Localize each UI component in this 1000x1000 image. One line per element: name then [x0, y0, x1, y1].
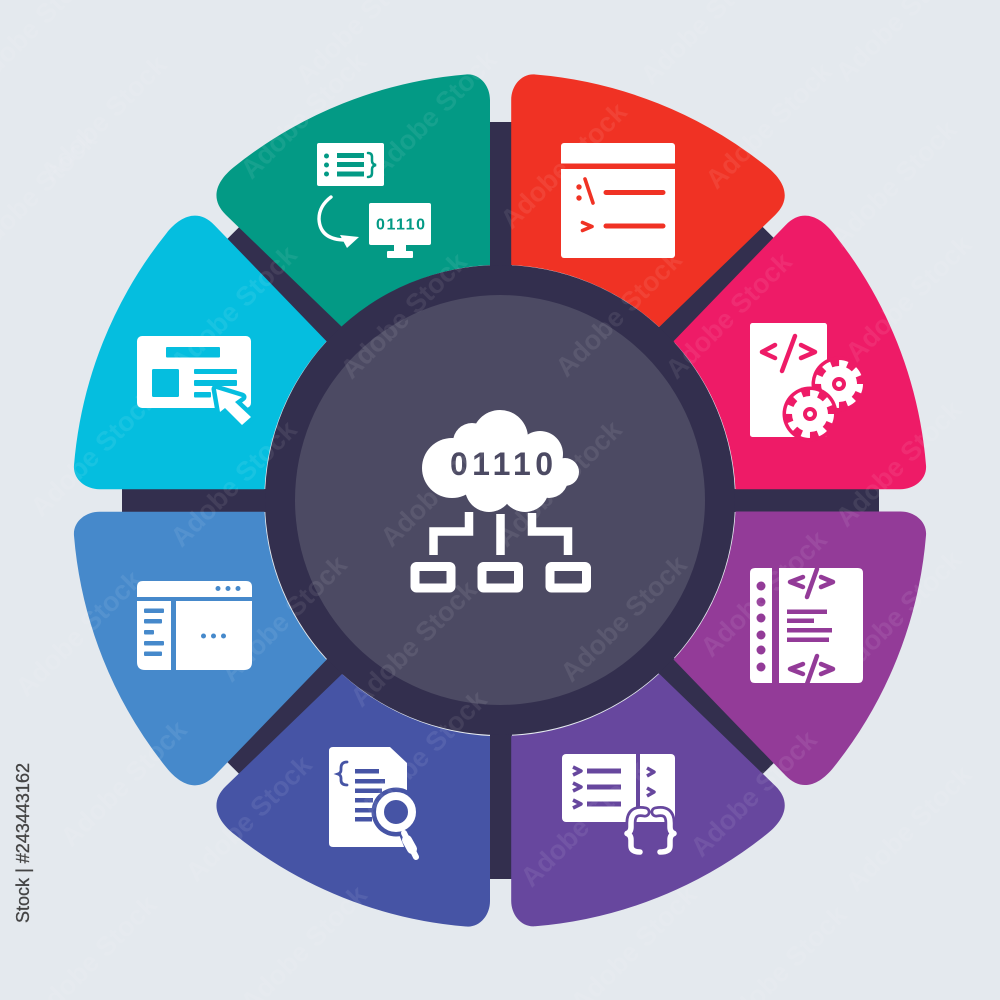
- segment: red: [511, 74, 785, 327]
- stock id label: Stock | #243443162: [13, 763, 33, 923]
- watermark text: Adobe Stock: [235, 46, 373, 185]
- panel: code settings: [674, 216, 926, 489]
- icon: code document with gears: [750, 323, 866, 442]
- icon: code editor page: [750, 568, 863, 684]
- watermark text: Adobe Stock: [25, 384, 163, 523]
- watermark text: Adobe Stock: [660, 246, 798, 385]
- icon: cloud binary network: [415, 410, 586, 588]
- segment: blue: [74, 512, 326, 785]
- network nodes: [415, 566, 586, 588]
- panel: code book: [511, 674, 785, 926]
- watermark text: Adobe Stock: [830, 544, 968, 683]
- watermark text: Adobe Stock: [345, 574, 483, 713]
- watermark text: Adobe Stock: [215, 549, 353, 688]
- watermark text: Adobe Stock: [700, 56, 838, 195]
- watermark text: Adobe Stock: [490, 414, 628, 553]
- icon: open book with braces: [562, 754, 675, 852]
- binary label: 01110: [450, 446, 553, 482]
- panel: code to binary: [216, 74, 490, 327]
- watermark text: Adobe Stock: [685, 724, 823, 863]
- watermark text: Adobe Stock: [830, 394, 968, 533]
- panel: website click: [74, 216, 326, 489]
- dark cross spokes behind the segments: [122, 122, 879, 879]
- icon: code converted to binary monitor: [317, 143, 431, 258]
- segment: magenta purple: [674, 512, 926, 785]
- watermark text: Adobe Stock: [515, 754, 653, 893]
- icon: terminal window: [561, 143, 675, 258]
- watermark text: Adobe Stock: [375, 414, 513, 553]
- segment: pink: [674, 216, 926, 489]
- central hub ring: [265, 265, 735, 735]
- watermark text: Adobe Stock: [495, 96, 633, 235]
- icon: code converted to binary monitor: 01110: [376, 216, 425, 234]
- icon: browser window with sidebar: [137, 581, 252, 670]
- panel: terminal command line: [511, 74, 785, 327]
- network connectors: [434, 512, 568, 555]
- watermark text: Adobe Stock: [840, 759, 978, 898]
- panel: code editor: [674, 512, 926, 785]
- watermark text: Adobe Stock: [180, 749, 318, 888]
- watermark text: Adobe Stock: [335, 246, 473, 385]
- watermark text: Adobe Stock: [555, 549, 693, 688]
- panel: code search: [216, 674, 490, 927]
- watermark text: Adobe Stock: [365, 44, 503, 183]
- watermark text: Adobe Stock: [35, 49, 173, 188]
- icon: web page with cursor: [137, 336, 251, 425]
- watermark text: Adobe Stock: [355, 684, 493, 823]
- watermark text: Adobe Stock: [695, 524, 833, 663]
- watermark text: Adobe Stock: [165, 239, 303, 378]
- watermark text: Adobe Stock: [10, 564, 148, 703]
- icon: document with magnifier: [329, 747, 426, 866]
- central disc: [295, 295, 705, 705]
- panel: web app layout: [74, 512, 326, 785]
- segment: green: [216, 74, 490, 327]
- watermark text: Adobe Stock: [840, 229, 978, 368]
- watermark text: Adobe Stock: [825, 114, 963, 253]
- segment: indigo: [216, 674, 490, 927]
- watermark text: Adobe Stock: [55, 714, 193, 853]
- watermark text: Adobe Stock: [165, 414, 303, 553]
- segment: violet: [511, 674, 785, 926]
- watermark text: Adobe Stock: [550, 244, 688, 383]
- cloud: [422, 410, 579, 512]
- segment: cyan: [74, 216, 326, 489]
